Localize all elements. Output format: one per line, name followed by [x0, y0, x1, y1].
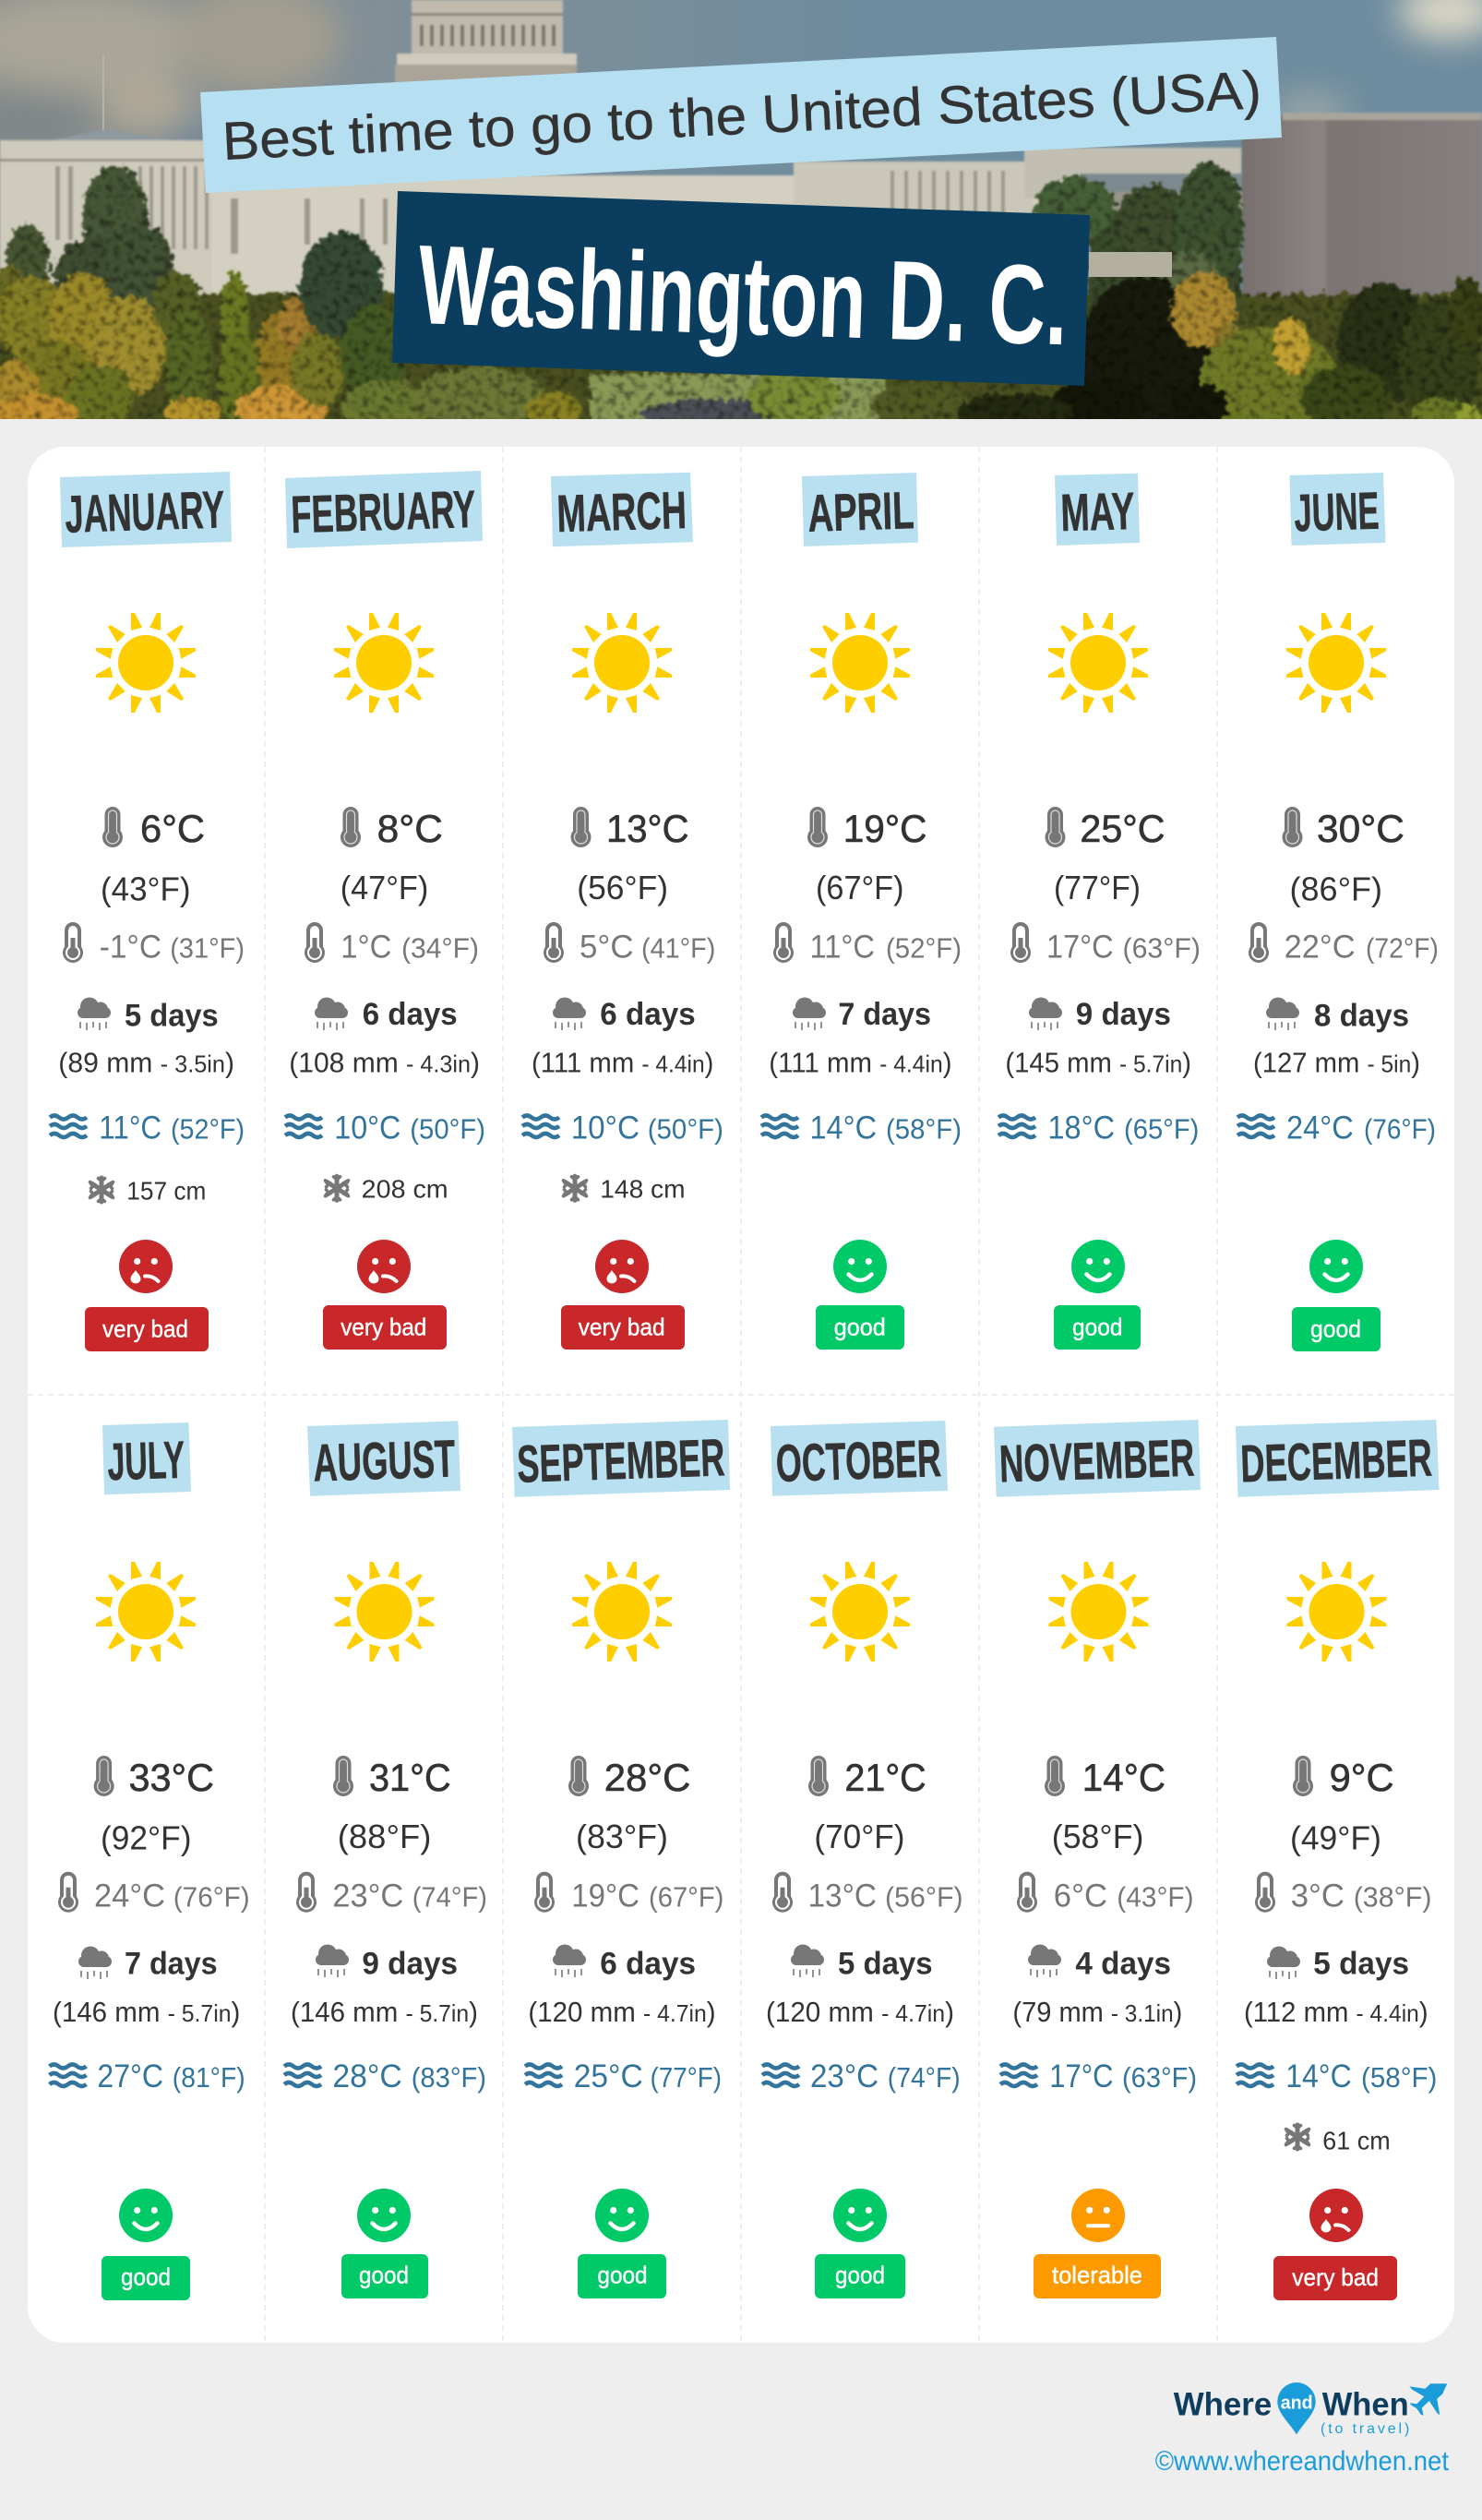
panel: July: [50, 1422, 250, 2300]
low temperature: [1010, 922, 1201, 966]
icon: sun: [1048, 1562, 1148, 1662]
snowfall: 157 cm: [126, 1176, 206, 1205]
rainfall: (111 mm - 4.4in): [532, 1047, 713, 1079]
sea temperature: 10°C: [571, 1110, 639, 1146]
panel: December: [1236, 1420, 1440, 2300]
high temperature: 13°C: [606, 807, 688, 850]
snowfall: [325, 1174, 448, 1203]
month label: April: [802, 473, 918, 546]
snowfall: [563, 1174, 685, 1203]
rainfall: (146 mm - 5.7in): [291, 1996, 478, 2028]
centre building: [212, 175, 1043, 295]
icon: sun: [810, 613, 910, 713]
high temperature: [807, 807, 926, 850]
rainy days: 6 days: [363, 997, 458, 1032]
low temperature: (43°F): [1117, 1881, 1194, 1914]
high temperature: 19°C: [843, 807, 926, 850]
trees: [0, 162, 1482, 441]
rating: very bad: [85, 1307, 209, 1351]
low temperature: 24°C: [94, 1878, 165, 1914]
high temperature in Fahrenheit: (47°F): [341, 869, 428, 906]
rainfall: (79 mm - 3.1in): [1012, 1996, 1182, 2028]
rainfall: (120 mm - 4.7in): [528, 1996, 716, 2028]
sea temperature: 10°C: [334, 1110, 400, 1146]
high temperature in Fahrenheit: (49°F): [1290, 1818, 1381, 1857]
month label: March: [551, 473, 693, 546]
rainfall: (108 mm - 4.3in): [289, 1047, 480, 1079]
month label: June: [1290, 473, 1386, 546]
rating: very bad: very bad: [341, 1314, 426, 1341]
sea temperature: [284, 2058, 486, 2094]
high temperature in Fahrenheit: (86°F): [1290, 870, 1382, 908]
sea temperature: (83°F): [412, 2061, 486, 2094]
rainfall: (120 mm - 4.7in): [766, 1996, 954, 2028]
rainy days: 9 days: [362, 1946, 458, 1981]
rainfall: (111 mm - 4.4in): [769, 1047, 952, 1079]
high temperature in Fahrenheit: (58°F): [1052, 1818, 1143, 1855]
panel: January: [50, 472, 245, 1351]
icon: map pin: and: [1281, 2393, 1313, 2413]
low temperature: 11°C: [810, 930, 875, 966]
month label: February: FEBRUARY: [290, 480, 476, 545]
panel: May: [998, 474, 1201, 1350]
rainy days: [791, 1944, 933, 1981]
low temperature: (63°F): [1122, 932, 1201, 965]
month label: July: JULY: [107, 1431, 185, 1492]
icon: sun: [334, 1562, 434, 1662]
low temperature: 17°C: [1046, 930, 1114, 966]
dome: [412, 0, 563, 62]
icon: sun: [810, 1562, 910, 1662]
low temperature: -1°C: [100, 930, 161, 966]
high temperature in Fahrenheit: (88°F): [338, 1818, 431, 1855]
rating: very bad: very bad: [1292, 2263, 1379, 2291]
rating: good: [578, 2254, 666, 2298]
rainy days: [553, 997, 696, 1032]
month label: March: MARCH: [556, 481, 687, 544]
month label: August: AUGUST: [312, 1429, 456, 1494]
low temperature: [63, 922, 245, 966]
high temperature: 8°C: [377, 807, 443, 850]
rainy days: [793, 997, 931, 1032]
rating: good: good: [1072, 1314, 1122, 1341]
month label: October: [771, 1421, 948, 1496]
subtitle banner: Best time to go to the United States (USA): [221, 60, 1262, 172]
icon: sun: [96, 613, 196, 713]
rating: good: [816, 1305, 904, 1350]
panel: February: [285, 471, 485, 1350]
high temperature: 21°C: [844, 1756, 926, 1799]
rainy days: [78, 1946, 218, 1981]
low temperature: [534, 1872, 723, 1914]
low temperature: (34°F): [401, 932, 479, 965]
subtitle banner: [200, 37, 1282, 193]
rainy days: [78, 997, 219, 1034]
month label: October: OCTOBER: [775, 1429, 942, 1494]
sea temperature: [522, 1110, 723, 1146]
high temperature in Fahrenheit: (56°F): [577, 869, 668, 906]
rating: tolerable: [1034, 2254, 1161, 2298]
high temperature: [570, 807, 688, 850]
rainy days: 8 days: [1314, 999, 1409, 1034]
low temperature: 5°C: [580, 930, 633, 966]
panel: June: [1237, 473, 1439, 1351]
high temperature in Fahrenheit: (67°F): [816, 869, 904, 906]
high temperature: 6°C: [140, 807, 205, 850]
sea temperature: 14°C: [810, 1110, 877, 1146]
low temperature: 1°C: [341, 930, 391, 966]
sea temperature: [1237, 1110, 1436, 1146]
low temperature: [772, 1872, 963, 1914]
rainy days: [1266, 997, 1409, 1034]
icon: good face: [833, 2189, 887, 2242]
low temperature: 13°C: [808, 1878, 877, 1914]
month label: May: [1055, 474, 1140, 546]
month label: April: APRIL: [807, 481, 914, 544]
low temperature: 22°C: [1285, 930, 1356, 966]
low temperature: [296, 1872, 487, 1914]
high temperature: 31°C: [369, 1756, 451, 1799]
rainy days: 6 days: [600, 997, 696, 1032]
high temperature: 30°C: [1317, 807, 1404, 850]
left building: [0, 140, 221, 297]
icon: good face: [119, 2189, 173, 2242]
logo: Where and When: Where: [1174, 2387, 1272, 2423]
high temperature: 33°C: [129, 1756, 214, 1799]
high temperature in Fahrenheit: (92°F): [101, 1818, 192, 1857]
snowfall: 208 cm: [362, 1174, 448, 1203]
panel: April: [761, 473, 962, 1350]
rainy days: [1028, 1944, 1171, 1981]
icon: sun: [1048, 613, 1148, 713]
low temperature: [1017, 1872, 1194, 1914]
low temperature: (52°F): [886, 932, 962, 965]
month label: January: [60, 472, 232, 547]
icon: sun: [334, 613, 434, 713]
rating: good: good: [1310, 1314, 1361, 1342]
sea temperature: (65°F): [1124, 1112, 1199, 1145]
website credit: ©www.whereandwhen.net: [1155, 2446, 1450, 2477]
logo: Where and When: When: [1322, 2387, 1409, 2423]
sea temperature: (77°F): [650, 2061, 722, 2094]
rainy days: [553, 1944, 696, 1981]
rainy days: [1267, 1946, 1409, 1981]
icon: very bad face: [119, 1240, 173, 1293]
rating: good: [815, 2254, 905, 2298]
icon: very bad face: [1309, 2189, 1363, 2242]
snowfall: [90, 1176, 206, 1205]
panel: calendar card: [28, 447, 1454, 2343]
sea temperature: 25°C: [574, 2058, 643, 2094]
high temperature: [102, 807, 205, 850]
month label: September: SEPTEMBER: [516, 1428, 725, 1494]
month label: June: JUNE: [1294, 482, 1380, 543]
snowfall: 148 cm: [600, 1174, 685, 1203]
high temperature in Fahrenheit: (70°F): [814, 1818, 904, 1855]
high temperature: [333, 1756, 451, 1799]
rainy days: 5 days: [838, 1946, 933, 1981]
low temperature: [305, 922, 479, 966]
sea temperature: (58°F): [886, 1112, 962, 1145]
rainy days: 4 days: [1075, 1946, 1171, 1981]
sea temperature: [525, 2058, 722, 2094]
icon: map pin: [1277, 2382, 1316, 2434]
panel: March: [522, 473, 723, 1350]
sea temperature: [1237, 2058, 1437, 2094]
low temperature: 19°C: [571, 1878, 639, 1914]
month label: February: [285, 471, 483, 548]
rating: good: good: [597, 2262, 648, 2289]
sea temperature: 18°C: [1048, 1110, 1115, 1146]
rainy days: [1029, 997, 1171, 1032]
sea temperature: (81°F): [173, 2061, 245, 2094]
icon: very bad face: [357, 1240, 411, 1293]
rating: good: good: [834, 1314, 886, 1341]
sea temperature: 11°C: [99, 1110, 161, 1146]
rainy days: [316, 1944, 458, 1981]
low temperature: 3°C: [1291, 1878, 1345, 1914]
panel: August: [284, 1421, 487, 2298]
icon: sun: [1286, 613, 1386, 713]
icon: good face: [357, 2189, 411, 2242]
sea temperature: 23°C: [810, 2058, 878, 2094]
rating: good: good: [359, 2262, 409, 2289]
title banner: Washington D. C.: [416, 222, 1070, 368]
snowfall: [1286, 2125, 1391, 2154]
right gray block: [1242, 115, 1482, 346]
rating: good: [341, 2254, 428, 2298]
sea temperature: (52°F): [171, 1112, 245, 1145]
sea temperature: 14°C: [1285, 2058, 1352, 2094]
high temperature: 25°C: [1080, 807, 1165, 850]
logo: Where and When: (to travel): [1321, 2421, 1409, 2437]
icon: good face: [1071, 1240, 1125, 1293]
month label: July: [102, 1422, 191, 1494]
rainfall: (127 mm - 5in): [1253, 1047, 1420, 1079]
high temperature in Fahrenheit: (83°F): [576, 1818, 668, 1855]
high temperature in Fahrenheit: (77°F): [1054, 869, 1141, 906]
rating: good: [102, 2256, 190, 2300]
low temperature: (67°F): [649, 1881, 723, 1914]
rainy days: 6 days: [600, 1946, 696, 1981]
rating: very bad: very bad: [102, 1314, 188, 1342]
icon: tolerable face: [1071, 2189, 1125, 2242]
icon: good face: [833, 1240, 887, 1293]
sea temperature: [50, 1110, 245, 1146]
month label: November: [994, 1420, 1201, 1497]
sea temperature: (58°F): [1361, 2061, 1437, 2094]
logo: Where and When: [1174, 2382, 1447, 2437]
high temperature: [1293, 1756, 1394, 1799]
rating: good: [1054, 1305, 1141, 1350]
title banner: [392, 191, 1090, 386]
low temperature: (56°F): [885, 1881, 963, 1914]
icon: sun: [572, 613, 672, 713]
sea temperature: [998, 1110, 1199, 1146]
rainfall: (146 mm - 5.7in): [53, 1996, 240, 2028]
sea temperature: [1000, 2058, 1197, 2094]
sea temperature: 17°C: [1049, 2058, 1113, 2094]
rainfall: (145 mm - 5.7in): [1005, 1047, 1191, 1079]
high temperature: [808, 1756, 926, 1799]
sea temperature: [762, 2058, 961, 2094]
sea temperature: [50, 2058, 245, 2094]
month label: August: [307, 1421, 460, 1496]
low temperature: (74°F): [412, 1881, 487, 1914]
icon: good face: [1309, 1240, 1363, 1293]
month label: May: MAY: [1060, 482, 1135, 543]
panel: September: [512, 1420, 730, 2298]
low temperature: (38°F): [1354, 1881, 1432, 1914]
month label: January: JANUARY: [64, 480, 225, 545]
rainy days: 5 days: [1313, 1946, 1409, 1981]
rating: very bad: [561, 1305, 685, 1350]
month label: September: [512, 1420, 730, 1497]
rating: good: [1292, 1307, 1380, 1351]
high temperature in Fahrenheit: (43°F): [101, 870, 190, 908]
icon: sun: [1286, 1562, 1386, 1662]
panel: October: [762, 1421, 963, 2298]
rating: very bad: [323, 1305, 447, 1350]
high temperature: [1045, 1756, 1165, 1799]
rating: good: good: [121, 2263, 171, 2291]
high temperature: [341, 807, 443, 850]
header photo: US Capitol with trees: [0, 0, 1482, 441]
low temperature: 23°C: [332, 1878, 403, 1914]
icon: very bad face: [595, 1240, 649, 1293]
sea temperature: [285, 1110, 485, 1146]
sea temperature: (63°F): [1122, 2061, 1197, 2094]
sea temperature: (76°F): [1364, 1112, 1436, 1145]
low temperature: [544, 922, 715, 966]
sea temperature: 27°C: [97, 2058, 163, 2094]
rainy days: 5 days: [125, 999, 219, 1034]
low temperature: [58, 1872, 250, 1914]
high temperature: 14°C: [1082, 1756, 1165, 1799]
low temperature: (72°F): [1366, 932, 1439, 965]
low temperature: (41°F): [641, 932, 715, 965]
rating: very bad: very bad: [579, 1314, 665, 1341]
rating: very bad: [1273, 2256, 1397, 2300]
rainy days: 7 days: [838, 997, 931, 1032]
low temperature: [773, 922, 962, 966]
high temperature: 28°C: [604, 1756, 690, 1799]
icon: airplane: [1409, 2383, 1447, 2416]
icon: good face: [595, 2189, 649, 2242]
high temperature: 9°C: [1330, 1756, 1394, 1799]
rainy days: 7 days: [125, 1946, 218, 1981]
sea temperature: (74°F): [888, 2061, 961, 2094]
sea temperature: 24°C: [1286, 1110, 1354, 1146]
sea temperature: 28°C: [332, 2058, 402, 2094]
rainy days: [315, 997, 458, 1032]
snowfall: 61 cm: [1322, 2126, 1391, 2154]
sea temperature: (50°F): [648, 1112, 723, 1145]
panel: November: [994, 1420, 1201, 2298]
month label: November: NOVEMBER: [998, 1429, 1195, 1494]
icon: sun: [572, 1562, 672, 1662]
low temperature: 6°C: [1054, 1878, 1107, 1914]
low temperature: [1255, 1872, 1432, 1914]
icon: sun: [96, 1562, 196, 1662]
sea temperature: [761, 1110, 962, 1146]
rating: good: good: [835, 2262, 885, 2289]
rainy days: 9 days: [1076, 997, 1171, 1032]
low temperature: (76°F): [173, 1881, 250, 1914]
low temperature: (31°F): [170, 932, 245, 965]
high temperature: [1045, 807, 1165, 850]
low temperature: [1249, 922, 1439, 966]
rainfall: (89 mm - 3.5in): [58, 1047, 234, 1079]
sea temperature: (50°F): [410, 1112, 485, 1145]
rating: tolerable: tolerable: [1052, 2261, 1142, 2288]
rainfall: (112 mm - 4.4in): [1244, 1996, 1428, 2028]
